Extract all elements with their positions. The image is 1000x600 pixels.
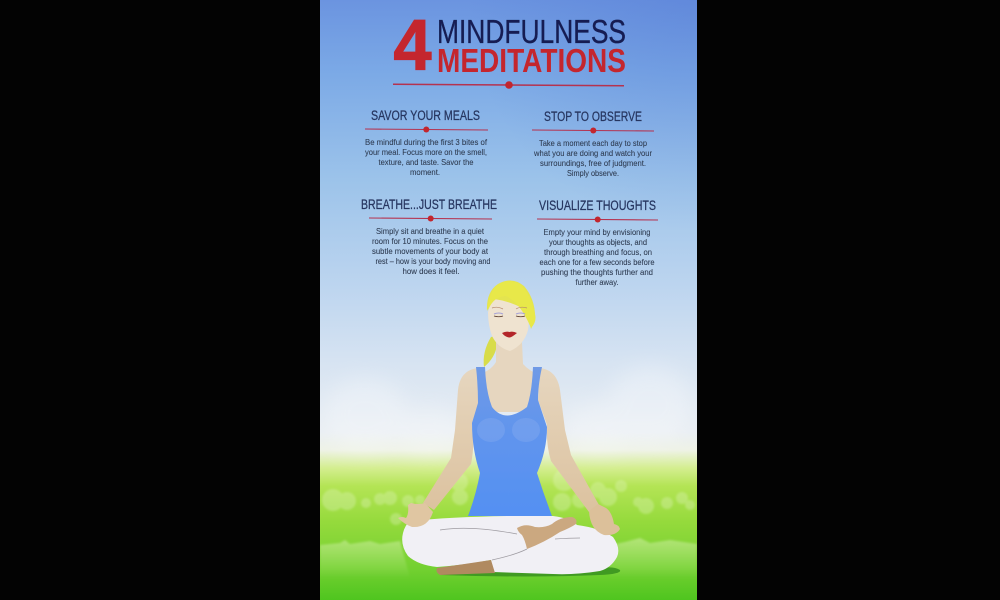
head and hair	[487, 280, 536, 351]
right hand	[589, 504, 620, 535]
panel: stop to observe	[532, 109, 654, 178]
text block: your thoughts as objects, and	[549, 237, 647, 247]
text block: texture, and taste. Savor the	[378, 157, 474, 167]
title line 1: MINDFULNESS	[437, 13, 626, 50]
lower foot	[436, 560, 495, 575]
text block: each one for a few seconds before	[540, 257, 655, 267]
divider	[537, 216, 658, 222]
eye shadow	[494, 313, 525, 314]
panel: breathe just breathe	[361, 197, 497, 276]
eyebrows	[492, 307, 527, 309]
divider	[365, 126, 488, 132]
text block: further away.	[576, 277, 618, 287]
upper foot	[517, 517, 576, 549]
ponytail	[484, 336, 497, 367]
text block	[540, 227, 655, 287]
divider	[369, 216, 492, 222]
heading: STOP TO OBSERVE	[544, 109, 642, 124]
text block: Be mindful during the first 3 bites of	[365, 137, 488, 147]
ground shadow	[440, 567, 620, 576]
text block: Simply sit and breathe in a quiet	[376, 226, 485, 236]
text block: surroundings, free of judgment.	[540, 158, 646, 168]
left hand	[398, 503, 433, 527]
tank top	[468, 367, 552, 516]
heading: VISUALIZE THOUGHTS	[539, 198, 656, 213]
text block: pushing the thoughts further and	[541, 267, 653, 277]
title line 2: MEDITATIONS	[437, 42, 626, 79]
text block: moment.	[410, 167, 440, 177]
panel: savor your meals	[365, 108, 488, 177]
numeral 4: 4	[394, 6, 432, 86]
text block	[533, 138, 652, 178]
background panel	[320, 0, 697, 600]
text block: Take a moment each day to stop	[539, 138, 647, 148]
illustration: meditating woman	[398, 280, 620, 576]
text block	[372, 226, 491, 276]
divider	[532, 128, 654, 134]
trouser folds	[440, 528, 580, 560]
title divider	[393, 81, 624, 89]
text block: Simply observe.	[567, 168, 619, 178]
text block: your meal. Focus more on the smell,	[365, 147, 487, 157]
text block	[365, 137, 488, 177]
text block: how does it feel.	[402, 266, 460, 276]
clouds	[348, 374, 675, 406]
hair fringe	[488, 281, 536, 328]
text block: room for 10 minutes. Focus on the	[372, 236, 488, 246]
hair back	[487, 280, 535, 329]
right arm	[538, 368, 599, 512]
text block: Empty your mind by envisioning	[544, 227, 651, 237]
face	[488, 299, 529, 351]
panel: visualize thoughts	[537, 198, 658, 287]
neck and chest	[476, 342, 541, 412]
text block: rest – how is your body moving and	[376, 256, 491, 266]
closed eyes	[494, 315, 525, 318]
title	[394, 6, 626, 86]
tank highlights	[477, 418, 540, 442]
left arm	[423, 368, 480, 510]
white trousers	[402, 516, 618, 574]
grass band	[320, 538, 697, 578]
text block: subtle movements of your body at	[372, 246, 489, 256]
heading: BREATHE...JUST BREATHE	[361, 197, 497, 212]
lips	[502, 332, 517, 338]
bokeh circles	[322, 469, 695, 525]
text block: what you are doing and watch your	[533, 148, 652, 158]
heading: SAVOR YOUR MEALS	[371, 108, 480, 123]
text block: through breathing and focus, on	[544, 247, 652, 257]
